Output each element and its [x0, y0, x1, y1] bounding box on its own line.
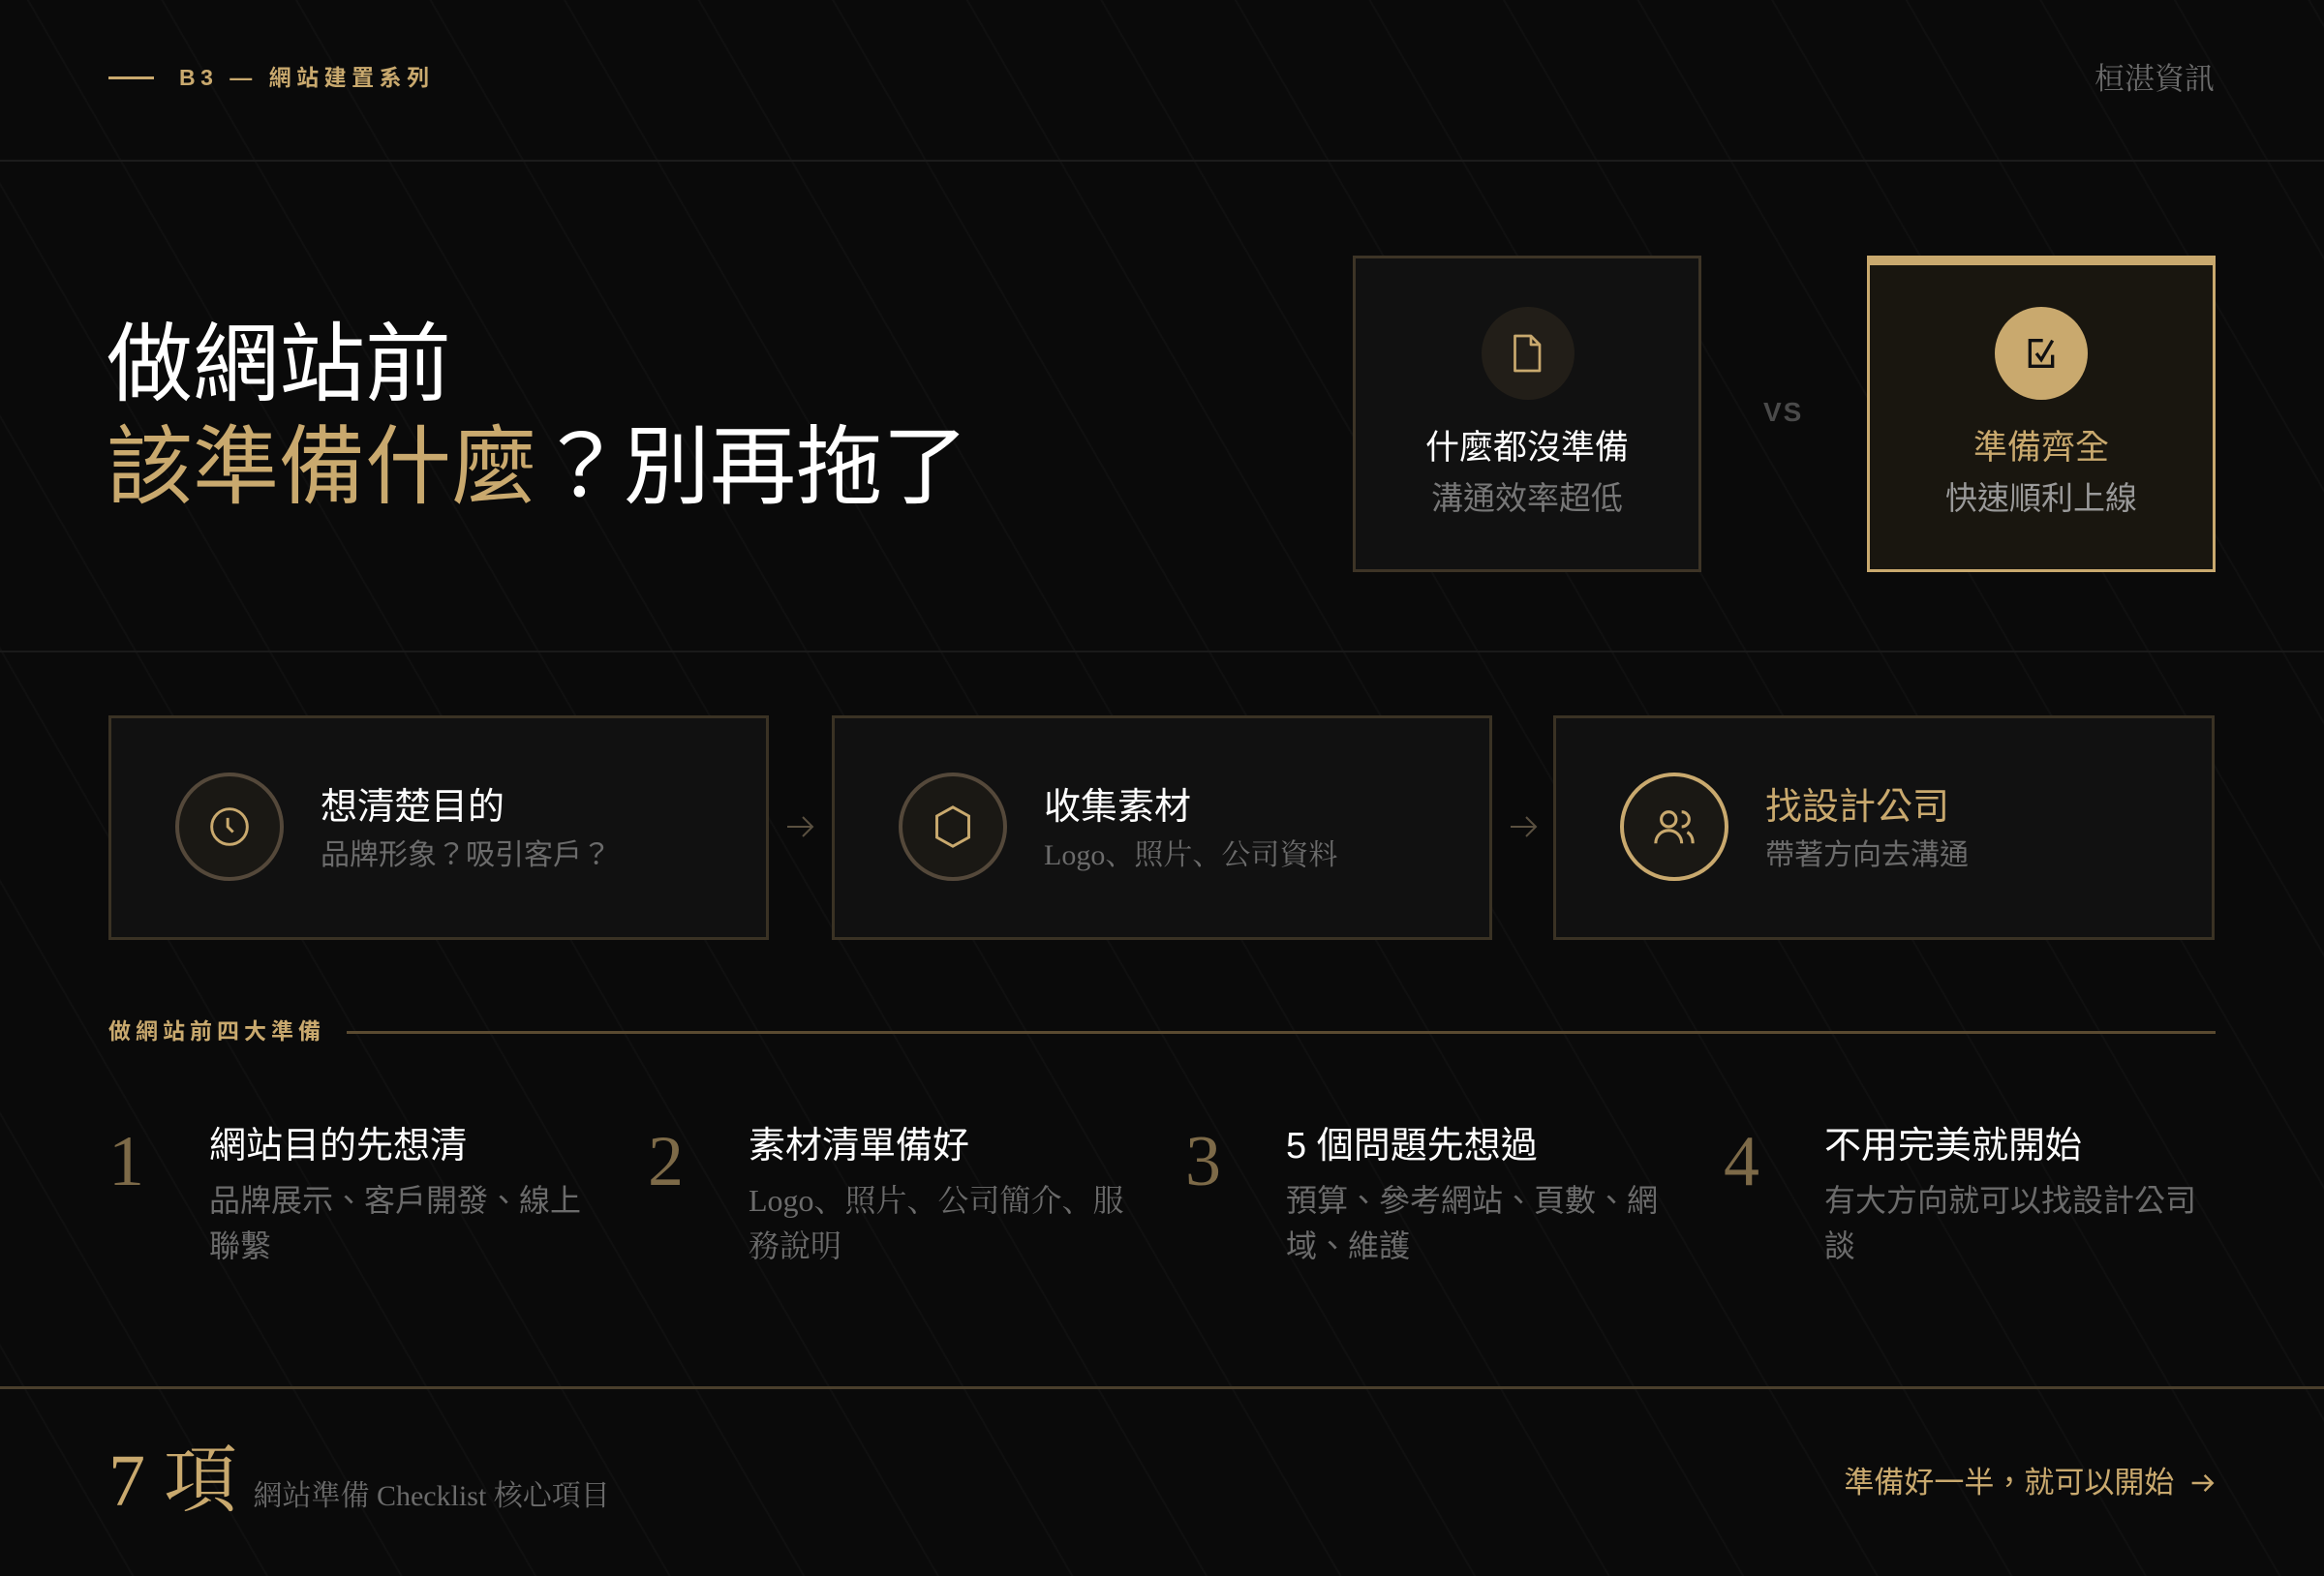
step 1	[108, 715, 769, 940]
brand name: 桓湛資訊	[2095, 62, 2215, 96]
step 1: 品牌形象？吸引客戶？	[321, 839, 611, 871]
item 1	[108, 1122, 581, 1263]
item 3: 5 個問題先想過	[1286, 1126, 1538, 1167]
step 3	[1553, 715, 2215, 940]
icon: people	[1620, 773, 1728, 881]
section heading: 做網站前四大準備	[108, 1018, 325, 1044]
step 1: 想清楚目的	[321, 787, 505, 828]
item 1: 1	[108, 1122, 144, 1201]
icon: hexagon	[899, 773, 1007, 881]
item 3: 3	[1185, 1122, 1221, 1201]
footer cta: 準備好一半，就可以開始	[1844, 1466, 2174, 1500]
header tag: B3 — 網站建置系列	[179, 65, 435, 90]
icon: clock	[175, 773, 284, 881]
item 3	[1185, 1122, 1658, 1263]
item 1: 網站目的先想清	[209, 1126, 467, 1167]
card: prepared: 快速順利上線	[1945, 480, 2137, 516]
title	[107, 316, 968, 515]
step 2: Logo、照片、公司資料	[1044, 839, 1337, 871]
step 3: 找設計公司	[1765, 787, 1949, 828]
title: 該準備什麼？別再拖了	[107, 418, 968, 515]
item 2: 2	[648, 1122, 684, 1201]
icon: check	[1995, 307, 2088, 400]
card: not prepared	[1353, 256, 1701, 572]
card: prepared: 準備齊全	[1973, 429, 2109, 467]
arrow	[787, 816, 813, 837]
item 4: 4	[1724, 1122, 1759, 1201]
item 4: 有大方向就可以找設計公司談	[1824, 1183, 2196, 1263]
icon: document	[1482, 307, 1575, 400]
item 4	[1724, 1122, 2196, 1263]
item 4: 不用完美就開始	[1824, 1126, 2082, 1167]
step 2: 收集素材	[1044, 787, 1191, 828]
card: not prepared: 什麼都沒準備	[1425, 429, 1629, 467]
item 1: 品牌展示、客戶開發、線上聯繫	[209, 1183, 581, 1263]
step 2	[832, 715, 1492, 940]
arrow	[1511, 816, 1538, 837]
vs label: VS	[1763, 397, 1803, 427]
card: not prepared: 溝通效率超低	[1431, 480, 1623, 516]
item 3: 預算、參考網站、頁數、網域、維護	[1286, 1183, 1658, 1263]
card: prepared	[1867, 256, 2216, 572]
item 2: Logo、照片、公司簡介、服務說明	[749, 1183, 1124, 1263]
item 2	[648, 1122, 1124, 1263]
title: 做網站前	[107, 316, 451, 412]
section heading	[108, 1018, 2216, 1044]
item 2: 素材清單備好	[749, 1126, 969, 1167]
footer stat: 7 項 網站準備 Checklist 核心項目	[108, 1440, 610, 1522]
step 3: 帶著方向去溝通	[1765, 839, 1969, 871]
